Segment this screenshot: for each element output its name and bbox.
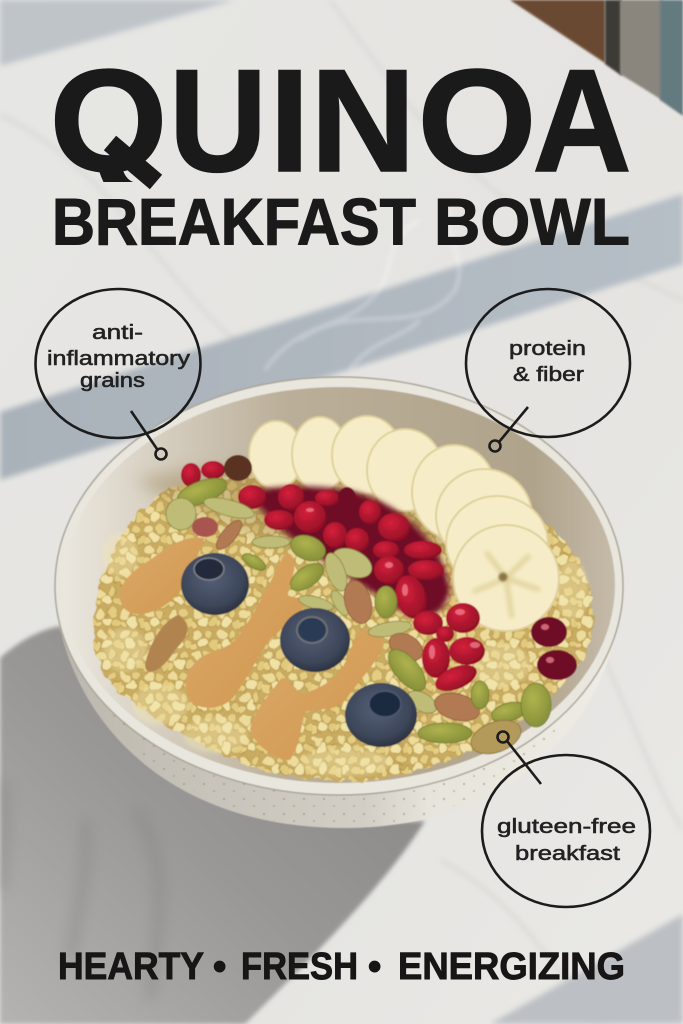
bowl outer body [55, 590, 622, 828]
bowl interior [63, 387, 615, 783]
tagline: • [213, 946, 226, 988]
subtitle: BREAKFAST BOWL: BOWL [434, 184, 630, 258]
title: QUINOA: N [310, 39, 416, 202]
tagline [58, 946, 625, 988]
callout: gluten-free breakfast [482, 732, 650, 907]
callout: anti-inflammatory grains: grains [80, 370, 145, 392]
title: QUINOA: I [269, 39, 310, 202]
callout: gluten-free breakfast: gluteen-free [497, 816, 636, 838]
tagline: ENERGIZING [398, 946, 625, 988]
tagline: HEARTY [58, 946, 204, 988]
subtitle: BREAKFAST BOWL: BREAKFAST [52, 184, 416, 258]
banana slices [249, 416, 559, 631]
callout: anti-inflammatory grains [36, 289, 200, 460]
title: QUINOA [54, 68, 629, 190]
title: QUINOA: A [532, 40, 632, 203]
steam wisps [265, 210, 459, 370]
pumpkin seeds and almonds [166, 473, 551, 760]
callout: gluten-free breakfast: breakfast [515, 843, 621, 865]
subtitle: BREAKFAST BOWL [52, 184, 630, 258]
title: QUINOA: Q [49, 39, 168, 202]
bowl with food [55, 377, 623, 828]
bowl rim [55, 377, 623, 795]
quinoa clumps [102, 533, 588, 776]
peanut butter drizzle [120, 537, 384, 760]
blueberries [181, 553, 417, 747]
tagline: • [368, 946, 381, 988]
callout: protein & fiber: & fiber [513, 364, 584, 386]
callout: anti-inflammatory grains: anti- [92, 322, 143, 344]
title: QUINOA: U [169, 38, 267, 202]
quinoa warm shading [135, 468, 540, 559]
callout: protein & fiber: protein [509, 338, 586, 360]
bowl speckles [90, 660, 600, 828]
pomegranate arils [181, 455, 577, 696]
window backdrop in top right corner [510, 0, 683, 116]
callout: protein & fiber [466, 289, 630, 452]
tagline: FRESH [241, 946, 358, 988]
quinoa bed [93, 473, 593, 781]
callout: anti-inflammatory grains: inflammatory [47, 348, 190, 370]
bowl cast shadow [0, 626, 425, 1024]
title: QUINOA: O [417, 38, 537, 202]
